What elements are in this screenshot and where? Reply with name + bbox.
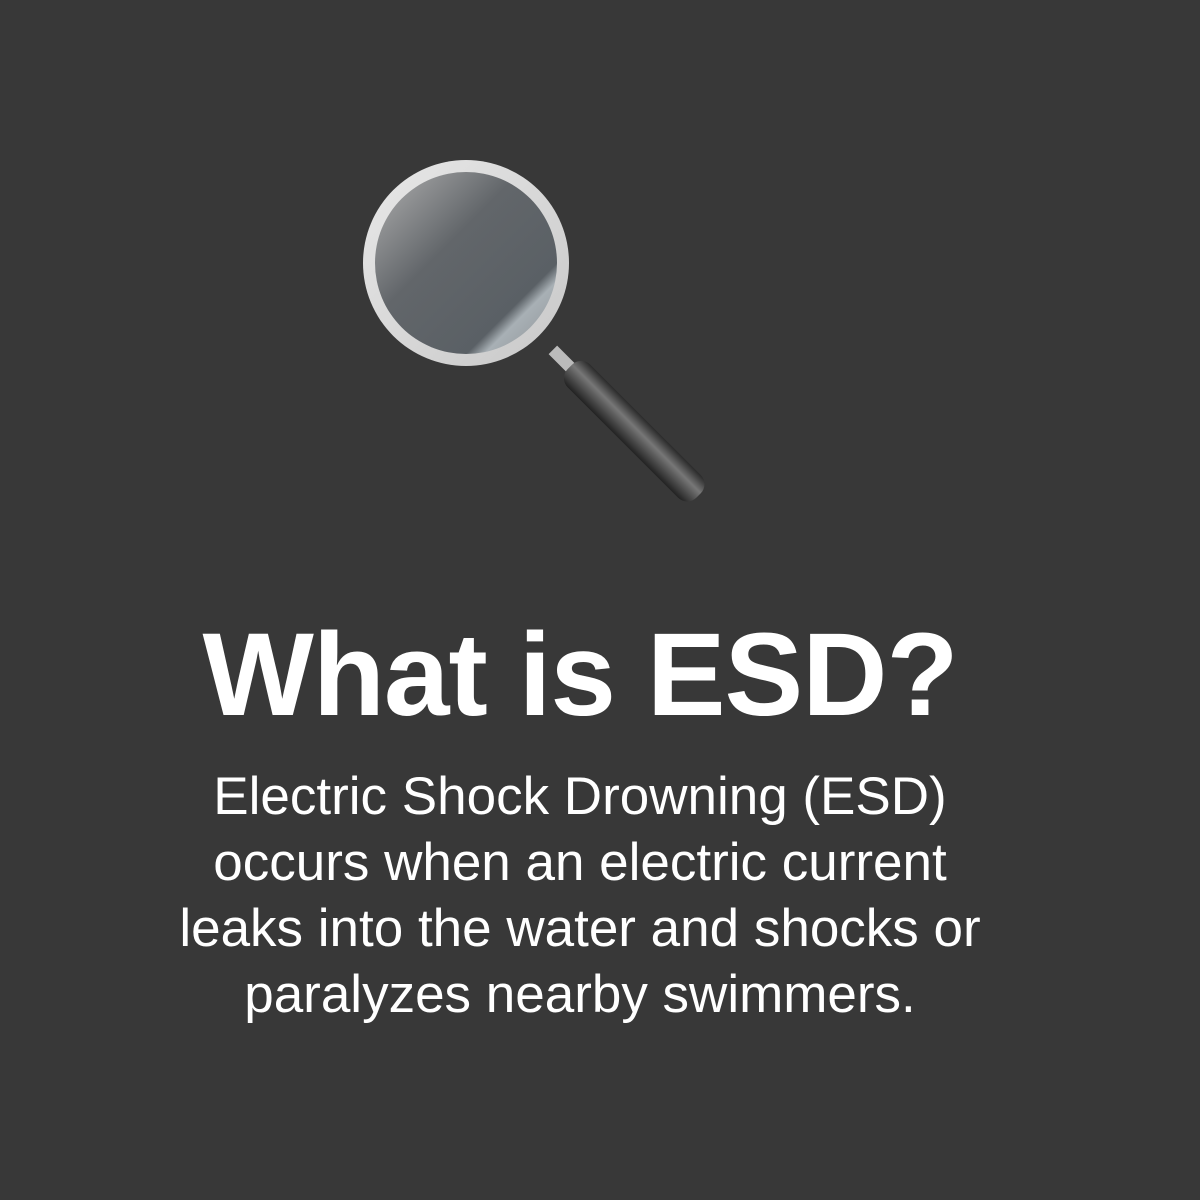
text block: definition: Electric Shock Drowning (ESD) bbox=[213, 767, 947, 826]
text block: definition: leaks into the water and shocks or bbox=[179, 899, 981, 958]
title: What is ESD? bbox=[202, 609, 958, 741]
text block: definition bbox=[179, 767, 981, 1024]
icon: magnifying glass bbox=[363, 160, 704, 501]
text block: definition: paralyzes nearby swimmers. bbox=[244, 965, 916, 1024]
text block: definition: occurs when an electric current bbox=[213, 833, 947, 892]
